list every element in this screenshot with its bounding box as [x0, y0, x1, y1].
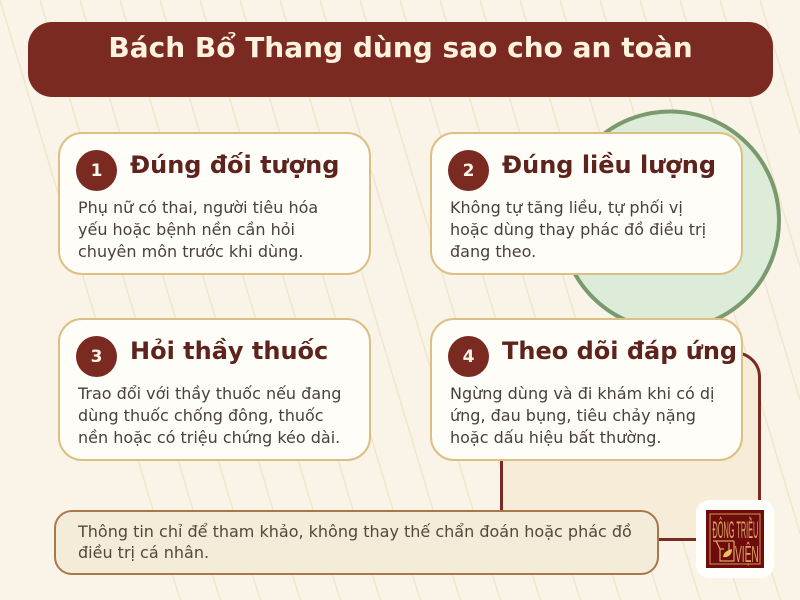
text 2: hoặc dùng thay phác đồ điều trị	[450, 220, 706, 239]
number badge 1	[76, 150, 117, 191]
title: Bách Bổ Thang dùng sao cho an toàn	[108, 31, 693, 64]
card 4: theo dõi đáp ứng	[430, 318, 743, 461]
text 3	[78, 384, 341, 447]
text 1: Phụ nữ có thai, người tiêu hóa	[78, 198, 318, 217]
text 1: chuyên môn trước khi dùng.	[78, 242, 304, 261]
number badge 3	[76, 336, 117, 377]
number badge 4	[448, 336, 489, 377]
card 3: hỏi thầy thuốc	[58, 318, 371, 461]
number badge 1: 1	[91, 161, 102, 181]
number badge 2	[448, 150, 489, 191]
text 3: dùng thuốc chống đông, thuốc	[78, 406, 324, 425]
text 1: yếu hoặc bệnh nền cần hỏi	[78, 220, 295, 239]
title banner	[28, 22, 773, 97]
number badge 4: 4	[463, 347, 474, 367]
heading 2: Đúng liều lượng	[502, 151, 716, 179]
logo: Đông Triều Y Viện: VIỆN	[735, 541, 759, 567]
card 2: đúng liều lượng	[430, 132, 743, 275]
text 2: Không tự tăng liều, tự phối vị	[450, 198, 683, 217]
text 3: nền hoặc có triệu chứng kéo dài.	[78, 428, 340, 447]
logo: Đông Triều Y Viện	[696, 500, 774, 578]
text 2	[450, 198, 706, 261]
text 4: Ngừng dùng và đi khám khi có dị	[450, 384, 714, 403]
disclaimer text	[78, 522, 632, 562]
heading 3: Hỏi thầy thuốc	[130, 337, 328, 365]
logo: Đông Triều Y Viện: ĐÔNG TRIỀU	[712, 515, 758, 543]
connector panel behind card 4	[500, 352, 761, 541]
decorative green circle	[573, 110, 781, 318]
disclaimer text: Thông tin chỉ để tham khảo, không thay thế chẩn đoán hoặc phác đồ	[78, 522, 632, 541]
heading 4: Theo dõi đáp ứng	[502, 337, 737, 365]
text 4: hoặc dấu hiệu bất thường.	[450, 428, 662, 447]
disclaimer text: điều trị cá nhân.	[78, 543, 209, 562]
number badge 3: 3	[91, 347, 102, 367]
text 3: Trao đổi với thầy thuốc nếu đang	[78, 384, 341, 403]
text 2: đang theo.	[450, 242, 536, 261]
text 1	[78, 198, 318, 261]
text 4: ứng, đau bụng, tiêu chảy nặng	[450, 406, 696, 425]
card 1: đúng đối tượng	[58, 132, 371, 275]
heading 1: Đúng đối tượng	[130, 151, 339, 179]
text 4	[450, 384, 714, 447]
number badge 2: 2	[463, 161, 474, 181]
disclaimer note	[54, 510, 659, 575]
